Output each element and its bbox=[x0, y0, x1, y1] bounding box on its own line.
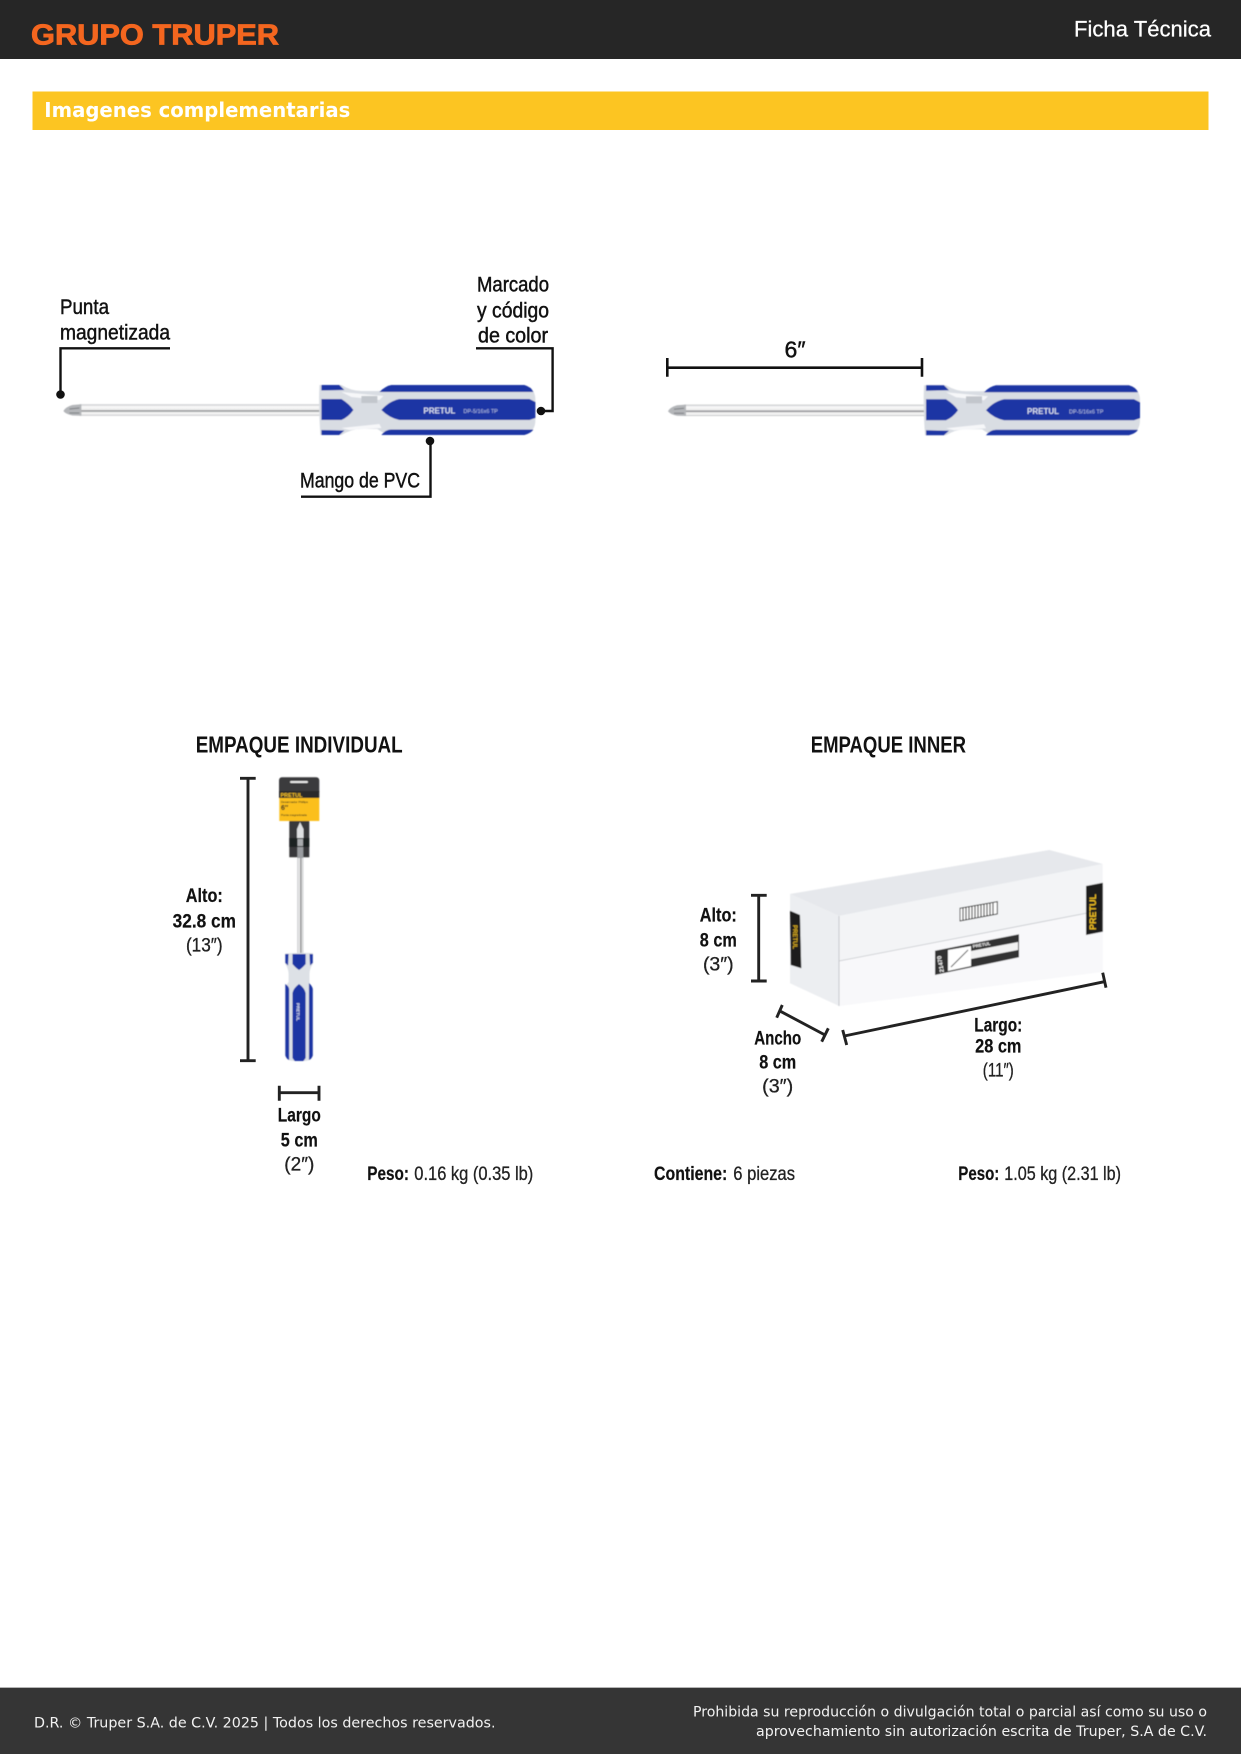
image: inner box: PRETUL bbox=[791, 925, 797, 949]
footer: legal notice: Prohibida su reproducción o divulgación total o parcial así como su uso o bbox=[693, 1705, 1207, 1721]
screwdriver image: DP-5/16x6 TP bbox=[463, 409, 498, 415]
screwdriver image: DP-5/16x6 TP bbox=[1069, 409, 1104, 415]
callout: Punta magnetizada: Punta bbox=[60, 296, 109, 319]
header bar bbox=[0, 0, 1241, 59]
panel: screwdriver length bbox=[667, 336, 1140, 435]
label: largo 28 cm bbox=[974, 1015, 1022, 1082]
label: alto 8 cm: (3″) bbox=[703, 954, 734, 976]
label: peso individual: Peso: bbox=[367, 1163, 409, 1185]
image: packaged screwdriver: PRETUL bbox=[296, 1003, 300, 1021]
label: alto 8 cm: Alto: bbox=[700, 905, 737, 927]
label: largo 5 cm: (2″) bbox=[284, 1154, 314, 1176]
footer: copyright: D.R. © Truper S.A. de C.V. 2025 | Todos los derechos reservados. bbox=[34, 1715, 496, 1731]
label: largo 28 cm: (11″) bbox=[983, 1060, 1014, 1082]
handle bbox=[285, 953, 313, 1061]
label: alto 32.8 cm: 32.8 cm bbox=[173, 910, 236, 932]
callout: Mango de PVC: Mango de PVC bbox=[300, 469, 420, 492]
label: peso individual: 0.16 kg (0.35 lb) bbox=[414, 1163, 533, 1185]
label: peso inner: 1.05 kg (2.31 lb) bbox=[1004, 1163, 1121, 1185]
image: inner box bbox=[790, 850, 1103, 1006]
image: packaged screwdriver: Desarmador Phillips bbox=[281, 800, 308, 804]
label: ancho 8 cm: 8 cm bbox=[759, 1051, 796, 1073]
callout: Marcado y código de color: y código bbox=[477, 300, 549, 323]
dimension: alto bbox=[751, 895, 767, 981]
panel: annotated screwdriver bbox=[56, 274, 553, 497]
label: peso inner bbox=[958, 1163, 1121, 1185]
image: packaged screwdriver: 6″ bbox=[281, 805, 289, 812]
label: largo 5 cm: 5 cm bbox=[281, 1130, 318, 1152]
label: peso inner: Peso: bbox=[958, 1163, 999, 1185]
label: ancho 8 cm: Ancho bbox=[754, 1027, 801, 1049]
image: packaged screwdriver bbox=[279, 777, 319, 1061]
dimension: 6 inch: 6″ bbox=[785, 336, 805, 362]
image: packaged screwdriver: PRETUL bbox=[280, 793, 303, 799]
label: largo 28 cm: 28 cm bbox=[975, 1036, 1021, 1058]
label: contiene: 6 piezas bbox=[733, 1163, 795, 1185]
label: ancho 8 cm: (3″) bbox=[762, 1075, 793, 1097]
callout: Mango de PVC bbox=[300, 437, 434, 497]
image: packaged screwdriver: Punta magnetizada bbox=[281, 813, 307, 817]
image: inner box: 21470 bbox=[937, 955, 946, 973]
callout: Marcado y código de color: de color bbox=[478, 325, 548, 348]
logo: Grupo Truper: GRUPO TRUPER bbox=[31, 20, 279, 52]
footer bar bbox=[0, 1687, 1241, 1754]
heading: Empaque inner: EMPAQUE INNER bbox=[811, 731, 966, 757]
label: contiene: Contiene: bbox=[654, 1163, 727, 1185]
section heading: Imagenes complementarias: Imagenes complementarias bbox=[44, 98, 350, 122]
label: largo 5 cm: Largo bbox=[278, 1105, 321, 1127]
label: contiene bbox=[654, 1163, 795, 1185]
section heading: Imagenes complementarias bbox=[32, 92, 1208, 130]
label: alto 32.8 cm bbox=[173, 885, 236, 957]
end label bbox=[790, 911, 801, 968]
dimension: ancho bbox=[777, 1005, 828, 1042]
callout: Punta magnetizada: magnetizada bbox=[60, 321, 170, 344]
dimension: alto bbox=[240, 778, 256, 1061]
callout: Punta magnetizada bbox=[56, 296, 170, 399]
label: largo 5 cm bbox=[278, 1105, 321, 1176]
header label: Ficha Técnica: Ficha Técnica bbox=[1074, 17, 1212, 42]
label: alto 8 cm: 8 cm bbox=[700, 930, 737, 952]
barcode bbox=[960, 902, 997, 921]
label: alto 8 cm bbox=[700, 905, 737, 976]
label: ancho 8 cm bbox=[754, 1027, 801, 1097]
heading: Empaque individual: EMPAQUE INDIVIDUAL bbox=[196, 731, 403, 757]
image: inner box: PRETUL bbox=[1088, 893, 1098, 930]
callout: Marcado y código de color: Marcado bbox=[477, 274, 549, 297]
screwdriver image bbox=[668, 385, 1140, 435]
screwdriver image: PRETUL bbox=[423, 406, 456, 416]
label: alto 32.8 cm: (13″) bbox=[186, 935, 223, 957]
card bbox=[279, 777, 319, 792]
footer: legal notice: aprovechamiento sin autorización escrita de Truper, S.A de C.V. bbox=[756, 1724, 1207, 1740]
dimension: largo bbox=[279, 1086, 319, 1101]
footer: legal notice bbox=[693, 1705, 1207, 1740]
screwdriver image: PRETUL bbox=[1027, 407, 1059, 416]
dimension: 6 inch bbox=[667, 336, 922, 377]
panel: empaque inner bbox=[654, 731, 1121, 1185]
image: inner box: PRETUL bbox=[972, 941, 991, 949]
callout: Marcado y código de color bbox=[476, 274, 553, 415]
screwdriver image bbox=[63, 385, 535, 435]
label: alto 32.8 cm: Alto: bbox=[186, 885, 223, 907]
panel: empaque individual bbox=[173, 731, 533, 1185]
label: largo 28 cm: Largo: bbox=[974, 1015, 1022, 1037]
product label bbox=[935, 934, 1019, 975]
dimension: largo bbox=[843, 973, 1106, 1045]
label: peso individual bbox=[367, 1163, 533, 1185]
